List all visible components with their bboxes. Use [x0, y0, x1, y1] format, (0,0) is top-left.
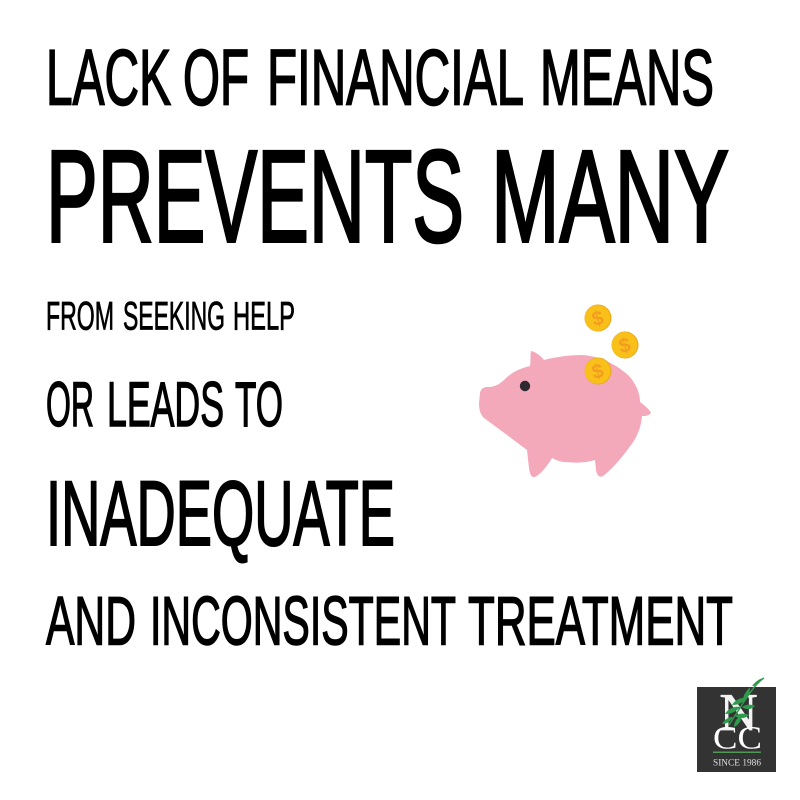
- logo olive branch: [722, 678, 764, 727]
- text: from seeking help: [46, 295, 295, 339]
- coin 3: $: [590, 360, 606, 384]
- logo: NCC since 1986: [697, 678, 776, 772]
- heading line: lack of financial means: FINANCIAL: [267, 34, 524, 122]
- heading line: lack of financial means: OF: [183, 34, 249, 122]
- pig eye: [520, 381, 530, 391]
- heading line: inadequate: INADEQUATE: [46, 463, 395, 565]
- text: or leads to: OR: [46, 370, 94, 440]
- pig body: [479, 351, 651, 477]
- text: or leads to: LEADS: [107, 370, 224, 440]
- logo green rule: [713, 752, 761, 753]
- icon: piggy bank with coins: [479, 304, 651, 477]
- heading line: lack of financial means: LACK: [46, 34, 171, 122]
- coin 2: $: [617, 334, 633, 358]
- text: or leads to: [46, 370, 283, 440]
- text: and inconsistent treatment: AND: [46, 582, 136, 659]
- heading line: prevents many: PREVENTS: [46, 122, 464, 270]
- coin 1: $: [590, 307, 606, 331]
- text: from seeking help: FROM: [46, 295, 114, 339]
- text: and inconsistent treatment: INCONSISTENT: [150, 582, 456, 659]
- text: from seeking help: SEEKING: [123, 295, 225, 339]
- logo letters CC: CC: [713, 720, 762, 756]
- coin 1: [584, 304, 612, 332]
- logo background: [697, 687, 776, 772]
- heading line: lack of financial means: [46, 34, 714, 122]
- coin 2: [612, 332, 638, 358]
- logo letter N: N: [719, 684, 758, 742]
- logo since 1986: SINCE 1986: [713, 758, 761, 768]
- text: or leads to: TO: [235, 370, 283, 440]
- coin 3: [584, 358, 612, 384]
- text: from seeking help: HELP: [233, 295, 295, 339]
